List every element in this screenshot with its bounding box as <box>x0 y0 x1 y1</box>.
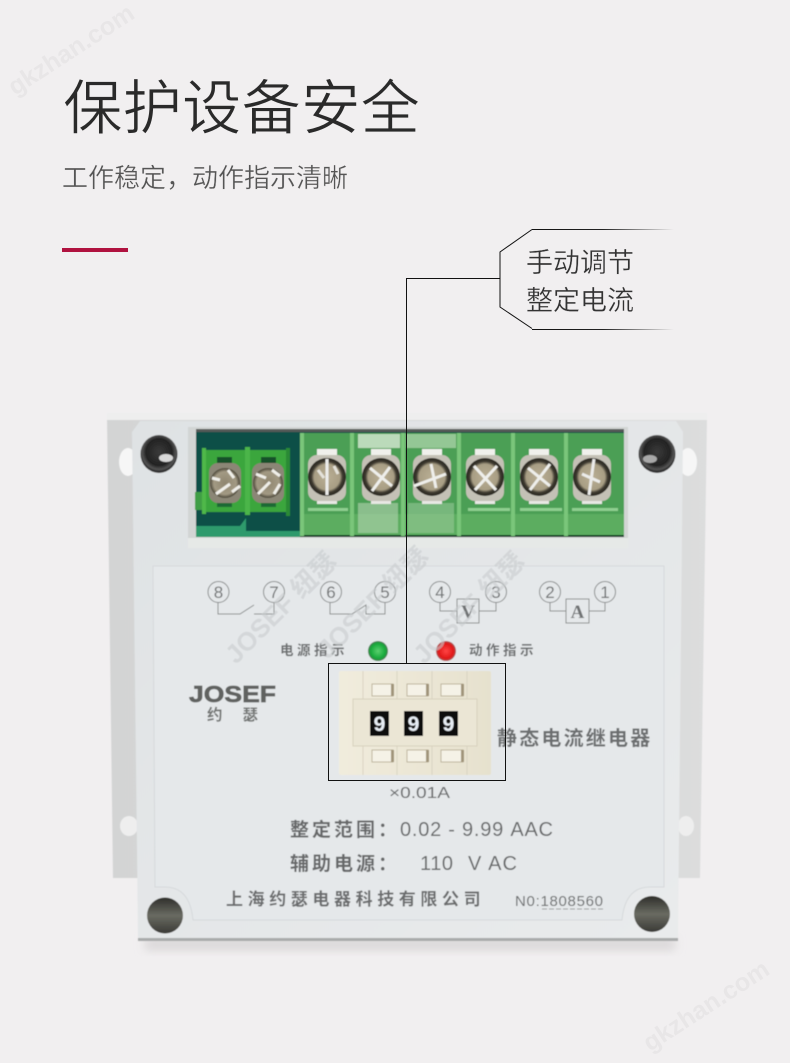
callout text <box>526 248 634 316</box>
terminal numbers <box>214 583 610 602</box>
setting range: 整定范围： <box>290 818 400 841</box>
adjust buttons <box>372 684 463 762</box>
large terminal block <box>300 433 624 537</box>
terminal numbers: 5 <box>380 583 390 602</box>
JOSEF logo: JOSEF <box>189 681 276 707</box>
terminal numbers: 7 <box>269 583 279 602</box>
front plate bottom edge <box>138 938 678 941</box>
digits: 9 <box>374 713 385 736</box>
front plate <box>132 421 683 940</box>
auxiliary power: 110 <box>420 853 453 875</box>
V and A symbols: A <box>571 602 585 623</box>
small terminal block <box>195 447 290 516</box>
terminal window <box>188 427 628 548</box>
red LED <box>436 641 456 661</box>
callout: manual adjustment <box>328 229 674 780</box>
V and A symbols: V <box>461 602 475 623</box>
terminal numbers: 4 <box>435 583 445 602</box>
terminal numbers: 1 <box>600 583 610 602</box>
digit windows <box>370 711 458 736</box>
terminal numbers: 8 <box>214 583 223 602</box>
serial number: N0:1808560 <box>515 893 603 910</box>
setting range: 0.02 - 9.99 AAC <box>400 819 553 841</box>
highlight box around dial <box>328 664 506 780</box>
brand watermarks on product: JOSEF 纽瑟 <box>219 546 342 669</box>
V and A symbols <box>461 602 585 623</box>
callout text: 手动调节 <box>526 248 634 278</box>
callout outline <box>500 229 674 330</box>
large screws <box>308 449 611 504</box>
small screws <box>209 463 284 503</box>
red accent bar <box>62 248 128 252</box>
label panel <box>153 566 664 920</box>
terminal numbers: 2 <box>545 583 555 602</box>
auxiliary power: V AC <box>468 853 517 875</box>
logo Chinese name: 约瑟 <box>207 706 278 724</box>
callout text: 整定电流 <box>526 286 634 316</box>
manufacturer name: 上海约瑟电器科技有限公司 <box>226 890 485 909</box>
subtitle: 工作稳定，动作指示清晰 <box>62 163 348 193</box>
wiring diagram <box>208 582 616 623</box>
product name: 静态电流继电器 <box>497 726 652 750</box>
digits: 9 <box>443 713 454 736</box>
digits: 9 <box>408 713 419 736</box>
brand watermarks on product: JOSEF 纽瑟 <box>311 541 434 664</box>
action indicator label: 动作指示 <box>469 642 537 658</box>
terminal numbers: 6 <box>326 583 336 602</box>
top mounting holes <box>140 435 676 473</box>
terminal numbers: 3 <box>491 583 501 602</box>
thumbwheel dial <box>339 671 491 775</box>
auxiliary power: 辅助电源： <box>290 853 400 875</box>
relay product photo <box>107 413 707 950</box>
bottom mounting holes <box>147 896 670 934</box>
green LED <box>368 641 388 661</box>
back mounting plate <box>107 413 707 878</box>
leader line <box>406 278 500 663</box>
watermark: top left: gkzhan.com <box>3 0 139 101</box>
brand watermarks on product <box>219 541 530 669</box>
multiplier label: ×0.01A <box>389 785 450 802</box>
title: 保护设备安全 <box>63 75 420 142</box>
digits <box>374 713 454 736</box>
serial number underline <box>542 908 604 910</box>
button shadows <box>391 684 464 762</box>
watermark: bottom right: gkzhan.com <box>638 955 774 1057</box>
power indicator label: 电源指示 <box>280 642 348 658</box>
brand watermarks on product: JOSEF 纽瑟 <box>407 546 530 669</box>
cast shadow <box>145 938 675 950</box>
